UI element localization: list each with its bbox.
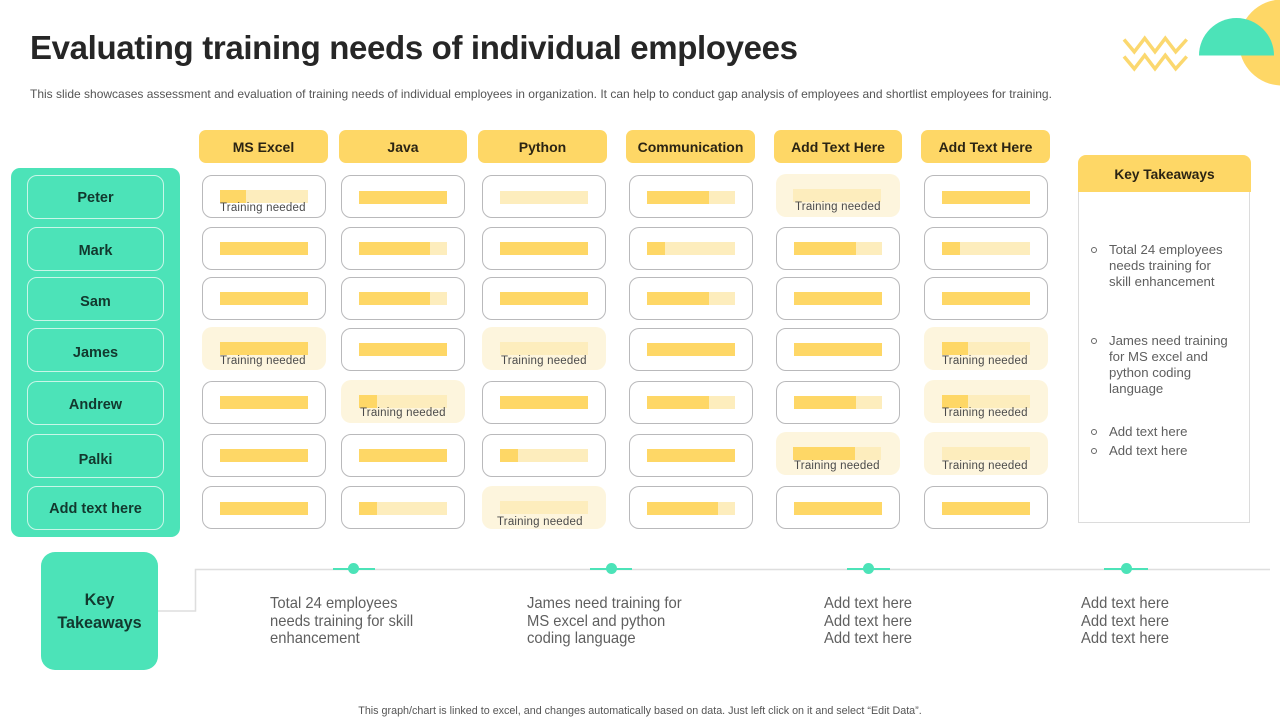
- sidebar body: [1078, 192, 1250, 523]
- rating: Add text Python: Training needed: [497, 516, 583, 528]
- rating: Mark Communication: [629, 227, 753, 270]
- column header: Add Text Here: [921, 130, 1050, 163]
- rating: Palki Add Text 2: Training needed: [942, 460, 1028, 472]
- timeline text 3: Add text here: [824, 595, 912, 612]
- rating: Andrew Communication: [629, 381, 753, 424]
- rating: Peter Java: [341, 175, 465, 218]
- rating: Palki Add Text 1: [776, 432, 900, 475]
- takeaway text 2: James need training: [1109, 333, 1228, 348]
- takeaway text 4: Add text here: [1109, 443, 1187, 458]
- takeaway text 1: skill enhancement: [1109, 274, 1215, 289]
- takeaway text 1: Total 24 employees: [1109, 242, 1223, 257]
- timeline text 2: [527, 595, 682, 647]
- rating: Add text Add Text 2: [924, 486, 1048, 529]
- timeline marker 1: [333, 563, 375, 574]
- title: Evaluating training needs of individual employees: [30, 29, 798, 66]
- rating: Andrew Java: Training needed: [360, 407, 446, 419]
- timeline text 4: Add text here: [1081, 630, 1169, 647]
- takeaway text 2: language: [1109, 381, 1163, 396]
- sidebar heading: [1078, 155, 1251, 192]
- key takeaways box: Takeaways: [57, 614, 142, 632]
- timeline text 4: Add text here: [1081, 595, 1169, 612]
- rating: Peter Add Text 1: Training needed: [795, 201, 881, 213]
- name: Peter: [27, 175, 164, 219]
- column header: MS Excel: MS Excel: [233, 139, 294, 155]
- rating: Add text Communication: [629, 486, 753, 529]
- sidebar heading: Key Takeaways: [1114, 167, 1215, 182]
- timeline text 3: Add text here: [824, 613, 912, 630]
- rating: James Add Text 1: [776, 328, 900, 371]
- column header: Communication: [626, 130, 755, 163]
- rating: Andrew Add Text 1: [776, 381, 900, 424]
- rating: Sam Add Text 1: [776, 277, 900, 320]
- rating: James Add Text 2: [924, 327, 1048, 370]
- timeline connector: [158, 568, 1270, 612]
- column header: Add Text Here: Add Text Here: [939, 139, 1032, 155]
- rating: Mark Add Text 2: [924, 227, 1048, 270]
- bullet marker: [1091, 247, 1097, 253]
- timeline text 3: [824, 595, 912, 647]
- bullet marker: [1091, 448, 1097, 454]
- name: Add text here: Add text here: [49, 501, 142, 517]
- rating: Palki Python: [482, 434, 606, 477]
- column header: MS Excel: [199, 130, 328, 163]
- rating: Palki Add Text 2: [924, 432, 1048, 475]
- rating: James MS Excel: Training needed: [220, 355, 306, 367]
- rating: Sam Add Text 2: [924, 277, 1048, 320]
- rating: James Python: [482, 327, 606, 370]
- takeaway text 2: for MS excel and: [1109, 349, 1208, 364]
- rating: James Java: [341, 328, 465, 371]
- rating: Mark Python: [482, 227, 606, 270]
- rating: Palki Communication: [629, 434, 753, 477]
- name: Andrew: [27, 381, 164, 425]
- column header: Add Text Here: [774, 130, 902, 163]
- rating: Add text MS Excel: [202, 486, 326, 529]
- name: James: James: [73, 345, 118, 361]
- rating: Peter Communication: [629, 175, 753, 218]
- rating: Palki MS Excel: [202, 434, 326, 477]
- rating: Andrew Java: [341, 380, 465, 423]
- rating: Andrew Python: [482, 381, 606, 424]
- timeline text 2: James need training for: [527, 595, 682, 612]
- rating: Add text Python: [482, 486, 606, 529]
- name: Sam: Sam: [80, 294, 111, 310]
- decoration: zigzag and semicircles: [1122, 0, 1280, 86]
- name: Peter: Peter: [77, 190, 114, 206]
- rating: Mark Java: [341, 227, 465, 270]
- rating: Peter Add Text 1: [776, 174, 900, 217]
- rating: James Communication: [629, 328, 753, 371]
- column header: Add Text Here: Add Text Here: [791, 139, 885, 155]
- key takeaways box: Key: [85, 591, 114, 609]
- timeline text 1: enhancement: [270, 630, 360, 647]
- rating: Sam Communication: [629, 277, 753, 320]
- takeaway text 3: Add text here: [1109, 424, 1187, 439]
- timeline text 1: Total 24 employees: [270, 595, 398, 612]
- rating: Peter Add Text 2: [924, 175, 1048, 218]
- rating: Andrew MS Excel: [202, 381, 326, 424]
- subtitle: This slide showcases assessment and evaluation of training needs of individual employees in organization. It can help to conduct gap analysis of employees and shortlist employees for training.: [30, 87, 1052, 101]
- name: James: [27, 328, 164, 372]
- name: Mark: [27, 227, 164, 271]
- panel: key takeaways sidebar: [1078, 155, 1251, 523]
- takeaway text 2: python coding: [1109, 365, 1191, 380]
- rating: Add text Java: [341, 486, 465, 529]
- rating: Peter MS Excel: [202, 175, 326, 218]
- timeline text 1: [270, 595, 413, 647]
- rating: Palki Add Text 1: Training needed: [794, 460, 880, 472]
- rating: James Add Text 2: Training needed: [942, 355, 1028, 367]
- rating: Mark Add Text 1: [776, 227, 900, 270]
- rating: Add text Add Text 1: [776, 486, 900, 529]
- panel: employee names: [11, 168, 180, 537]
- timeline text 2: coding language: [527, 630, 636, 647]
- footer note: This graph/chart is linked to excel, and changes automatically based on data. Just left click on it and select “Edit Data”.: [358, 705, 922, 717]
- column header: Communication: Communication: [638, 139, 743, 155]
- rating: Sam Python: [482, 277, 606, 320]
- column header: Java: Java: [387, 139, 419, 155]
- column header: Java: [339, 130, 467, 163]
- timeline marker 2: [590, 563, 632, 574]
- timeline text 2: MS excel and python: [527, 613, 665, 630]
- takeaway text 1: needs training for: [1109, 258, 1211, 273]
- rating: James Python: Training needed: [501, 355, 587, 367]
- timeline text 3: Add text here: [824, 630, 912, 647]
- name: Palki: [27, 434, 164, 478]
- timeline text 1: needs training for skill: [270, 613, 413, 630]
- rating: Mark MS Excel: [202, 227, 326, 270]
- rating: Peter Python: [482, 175, 606, 218]
- name: Add text here: [27, 486, 164, 530]
- timeline marker 4: [1104, 563, 1148, 574]
- name: Mark: Mark: [79, 243, 112, 259]
- name: Andrew: Andrew: [69, 397, 122, 413]
- rating: Andrew Add Text 2: [924, 380, 1048, 423]
- takeaway text 2: [1109, 333, 1228, 396]
- timeline text 4: [1081, 595, 1169, 647]
- key takeaways box: [41, 552, 158, 670]
- timeline marker 3: [847, 563, 890, 574]
- bullet marker: [1091, 429, 1097, 435]
- rating: Palki Java: [341, 434, 465, 477]
- timeline text 4: Add text here: [1081, 613, 1169, 630]
- name: Sam: [27, 277, 164, 321]
- rating: Andrew Add Text 2: Training needed: [942, 407, 1028, 419]
- rating: Sam MS Excel: [202, 277, 326, 320]
- rating: Peter MS Excel: Training needed: [220, 202, 306, 214]
- column header: Python: [478, 130, 607, 163]
- column header: Python: Python: [519, 139, 566, 155]
- bullet marker: [1091, 338, 1097, 344]
- name: Palki: Palki: [79, 452, 112, 468]
- rating: James MS Excel: [202, 327, 326, 370]
- takeaway text 1: [1109, 242, 1223, 289]
- rating: Sam Java: [341, 277, 465, 320]
